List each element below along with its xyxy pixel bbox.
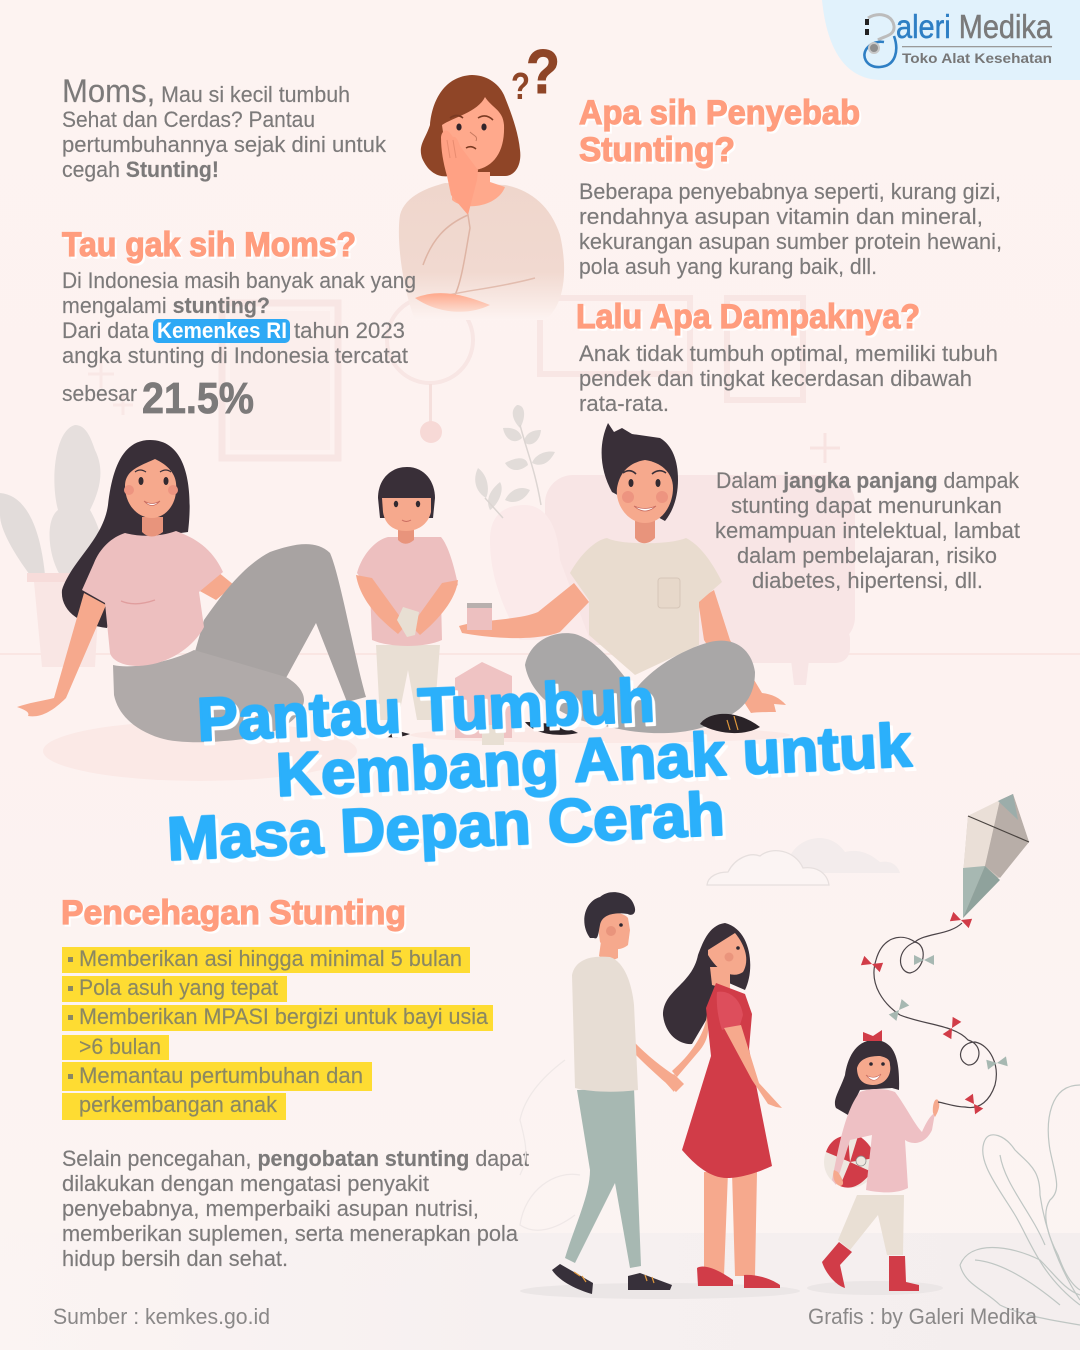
daughter	[807, 1030, 943, 1295]
logo panel	[822, 0, 1080, 80]
sad woman with question marks: ?	[511, 66, 530, 108]
text: dampak: rata-rata.	[579, 391, 669, 416]
intro text: pertumbuhannya sejak dini untuk	[62, 132, 387, 157]
prevention list highlighted: Memberikan MPASI bergizi untuk bayi usia	[79, 1004, 489, 1029]
intro text	[62, 73, 387, 182]
text: dampak	[579, 341, 998, 416]
text: stunting statistic	[62, 268, 416, 423]
heading: dampak: Lalu Apa Dampaknya?	[576, 298, 920, 336]
text: dampak: pendek dan tingkat kecerdasan dibawah	[579, 366, 972, 391]
main title: Kembang Anak untuk	[274, 711, 913, 809]
text: stunting statistic: Kemenkes RI	[157, 318, 287, 343]
graphic credit: Grafis : by Galeri Medika	[808, 1304, 1038, 1329]
treatment text: Selain pencegahan, pengobatan stunting dapat	[62, 1146, 529, 1171]
intro text: Sehat dan Cerdas? Pantau	[62, 107, 315, 132]
hand	[441, 131, 478, 215]
intro text: Moms, Mau si kecil tumbuh	[62, 73, 350, 109]
room decor background	[0, 297, 1080, 781]
main title: Masa Depan Cerah	[166, 780, 726, 873]
plant left with pot	[0, 425, 105, 667]
long term impact text: diabetes, hipertensi, dll.	[752, 568, 983, 593]
text: penyebab: pola asuh yang kurang baik, dll.	[579, 254, 877, 279]
heading: pencegahan: Pencehagan Stunting	[61, 894, 406, 932]
family walking	[520, 892, 943, 1299]
main title	[166, 666, 913, 873]
long term impact text: Dalam jangka panjang dampak	[716, 468, 1020, 493]
sofa	[490, 475, 855, 685]
mother sitting	[17, 440, 366, 742]
prevention list highlighted: Pola asuh yang tepat	[79, 975, 278, 1000]
text: stunting statistic: mengalami stunting?	[62, 293, 270, 318]
treatment text: dilakukan dengan mengatasi penyakit	[62, 1171, 429, 1196]
toy blocks	[370, 603, 578, 745]
treatment text: penyebabnya, memperbaiki asupan nutrisi,	[62, 1196, 479, 1221]
father	[552, 892, 677, 1294]
text: penyebab: Beberapa penyebabnya seperti, kurang gizi,	[579, 179, 1001, 204]
long term impact text: kemampuan intelektual, lambat	[715, 518, 1020, 543]
text: stunting statistic: angka stunting di Indonesia tercatat	[62, 343, 408, 368]
cloud	[707, 838, 900, 885]
text: penyebab: kekurangan asupan sumber protein hewani,	[579, 229, 1002, 254]
treatment text: memberikan suplemen, serta menerapkan pola	[62, 1221, 519, 1246]
text: stunting statistic: tahun 2023	[294, 318, 405, 343]
logo panel: Toko Alat Kesehatan	[902, 50, 1052, 66]
ground band bottom	[0, 1233, 1080, 1350]
decorative leaf outlines	[520, 1060, 1080, 1325]
treatment text: hidup bersih dan sehat.	[62, 1246, 288, 1271]
pill: Kemenkes RI	[153, 319, 290, 343]
father sitting	[459, 423, 786, 733]
text: stunting statistic: Di Indonesia masih banyak anak yang	[62, 268, 416, 293]
heading: penyebab: Stunting?	[579, 131, 735, 169]
prevention list highlighted: perkembangan anak	[79, 1092, 278, 1117]
question marks: ?	[526, 38, 560, 107]
text: penyebab	[579, 179, 1002, 279]
stat: 21.5%: 21.5%	[142, 374, 254, 423]
sweater	[399, 183, 564, 320]
prevention list highlighted: Memantau pertumbuhan dan	[79, 1063, 363, 1088]
face	[442, 97, 504, 170]
neck and collar	[452, 172, 505, 206]
hair	[421, 75, 520, 176]
main title: Pantau Tumbuh	[196, 666, 656, 754]
text: dampak: Anak tidak tumbuh optimal, memiliki tubuh	[579, 341, 998, 366]
long term impact text: stunting dapat menurunkan	[731, 493, 1002, 518]
text: stunting statistic: Dari data	[62, 318, 150, 343]
text: penyebab: rendahnya asupan vitamin dan mineral,	[579, 204, 983, 229]
logo wordmark: aleri Medika	[896, 8, 1053, 45]
prevention list highlighted: >6 bulan	[79, 1034, 161, 1059]
treatment text	[62, 1146, 529, 1271]
sad woman with question marks	[399, 38, 564, 320]
child standing	[356, 467, 458, 720]
long term impact text: dalam pembelajaran, risiko	[737, 543, 997, 568]
intro text: cegah Stunting!	[62, 157, 219, 182]
text: stunting statistic: sebesar	[62, 381, 137, 406]
prevention list highlighted: Memberikan asi hingga minimal 5 bulan	[79, 946, 462, 971]
heading: penyebab: Apa sih Penyebab	[579, 94, 860, 132]
heading: penyebab	[579, 94, 860, 169]
kite with tail and bows	[861, 794, 1029, 1114]
heading: Tau gak sih Moms: Tau gak sih Moms?	[62, 226, 356, 264]
prevention list highlighted	[62, 946, 493, 1120]
source credit: Sumber : kemkes.go.id	[53, 1304, 270, 1329]
plant twig	[475, 405, 555, 518]
mother	[663, 923, 782, 1288]
long term impact text	[715, 468, 1020, 593]
stethoscope icon	[864, 15, 896, 67]
